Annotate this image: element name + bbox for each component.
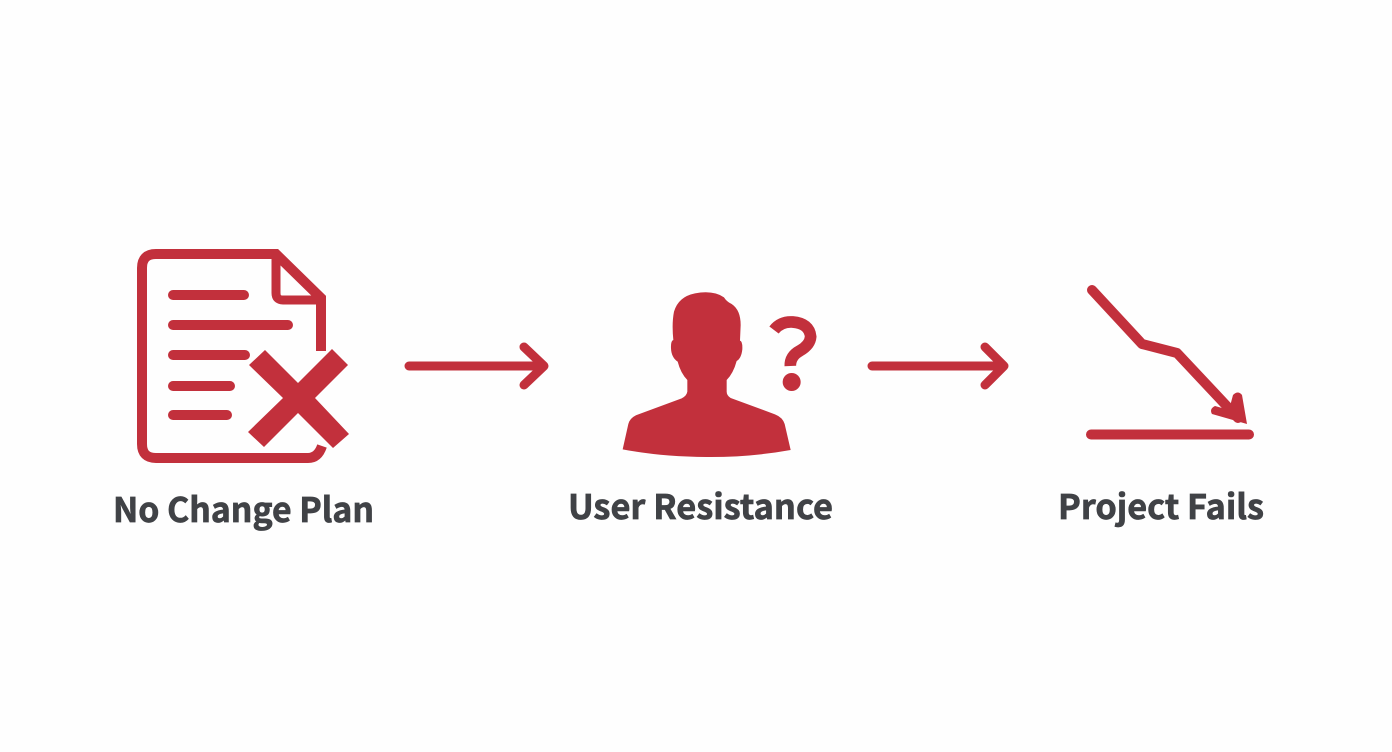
arrow: plan to resistance <box>409 347 544 385</box>
arrow: resistance to failure <box>872 347 1004 385</box>
label: User Resistance: User Resistance <box>568 480 833 529</box>
icon: declining trend arrow <box>1091 290 1249 434</box>
label: Project Fails: Project Fails <box>1058 480 1264 529</box>
label: No Change Plan: No Change Plan <box>113 483 374 532</box>
icon: document with red X <box>142 254 349 458</box>
icon: person with question mark <box>623 292 811 457</box>
